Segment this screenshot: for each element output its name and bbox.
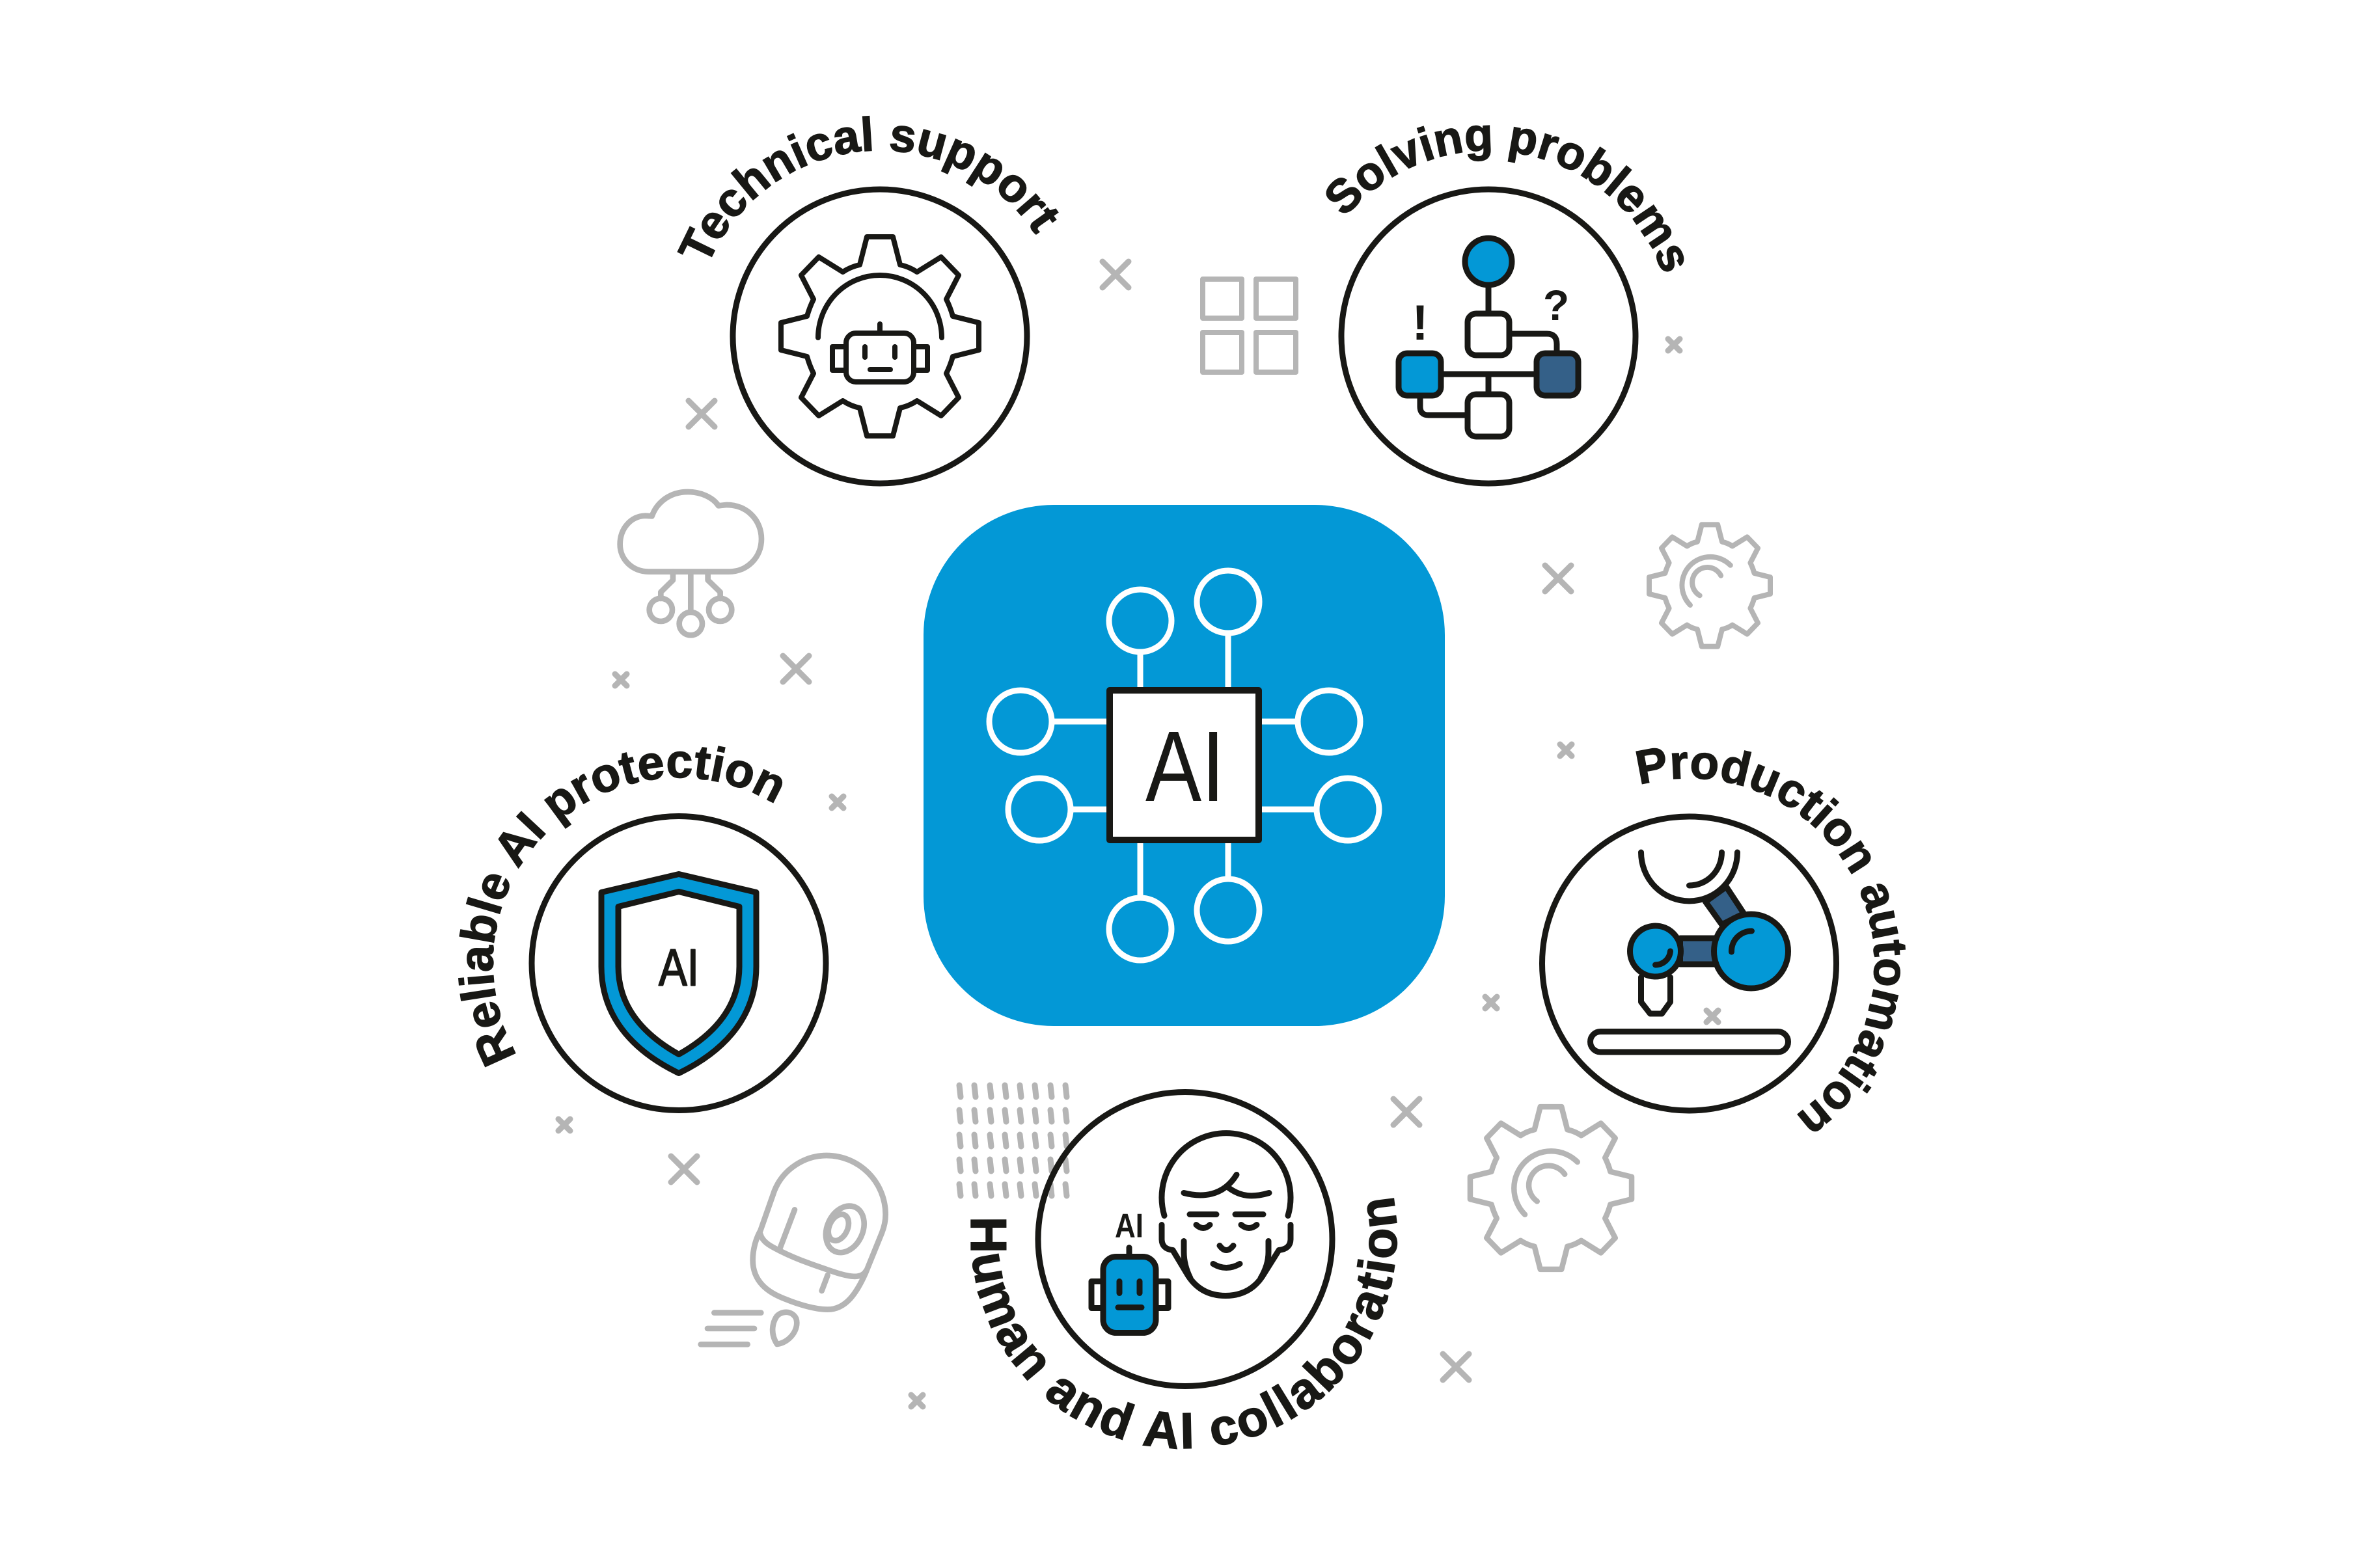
icon: human face and robot xyxy=(1091,1133,1291,1332)
chip square xyxy=(1110,690,1259,840)
ring xyxy=(532,816,826,1110)
panel: production automation xyxy=(1539,748,1906,1132)
heading: Reliable AI protection xyxy=(458,746,782,1067)
icon: flowchart xyxy=(1399,238,1578,437)
ring xyxy=(1038,1092,1332,1386)
panel: central AI chip tile xyxy=(924,505,1445,1026)
icon: shield xyxy=(601,874,756,1074)
alert mark: ! xyxy=(1412,295,1429,351)
icon: small grey crosses xyxy=(558,339,1680,1407)
ring xyxy=(1542,817,1837,1111)
chip label: AI xyxy=(1145,710,1225,822)
heading: Technical support xyxy=(677,116,1059,258)
ring xyxy=(1341,189,1636,483)
question mark: ? xyxy=(1543,281,1569,329)
heading: Production automation xyxy=(1636,748,1906,1132)
panel: reliable AI protection xyxy=(458,746,829,1113)
icon: large grey crosses xyxy=(671,262,1571,1380)
panel: technical support xyxy=(677,116,1059,487)
icon: gear with robot xyxy=(781,237,979,436)
human face xyxy=(1162,1133,1291,1296)
icon: grey grid xyxy=(1203,279,1296,372)
background decorative icons xyxy=(558,262,1770,1407)
icon: robot arm xyxy=(1591,852,1788,1052)
heading: Human and AI collaboration xyxy=(970,1198,1398,1450)
icon: grey rocket mouse xyxy=(701,1156,886,1344)
heading: Solving problems xyxy=(1326,125,1684,272)
network connector lines xyxy=(1052,633,1317,898)
network nodes xyxy=(989,571,1379,960)
ring xyxy=(733,189,1027,483)
shield label: AI xyxy=(659,938,699,997)
panel: solving problems xyxy=(1326,125,1684,487)
icon: grey dash pattern xyxy=(959,1085,1067,1196)
icon: grey cloud network xyxy=(620,492,761,635)
panel: human and AI collaboration xyxy=(970,1089,1398,1450)
robot xyxy=(1091,1248,1168,1332)
icon: large grey gear xyxy=(1470,1107,1632,1269)
icon: grey cross over ring xyxy=(1706,1010,1718,1022)
robot AI label: AI xyxy=(1115,1208,1143,1245)
blue rounded tile xyxy=(924,505,1445,1026)
icon: small grey gear xyxy=(1649,524,1770,647)
